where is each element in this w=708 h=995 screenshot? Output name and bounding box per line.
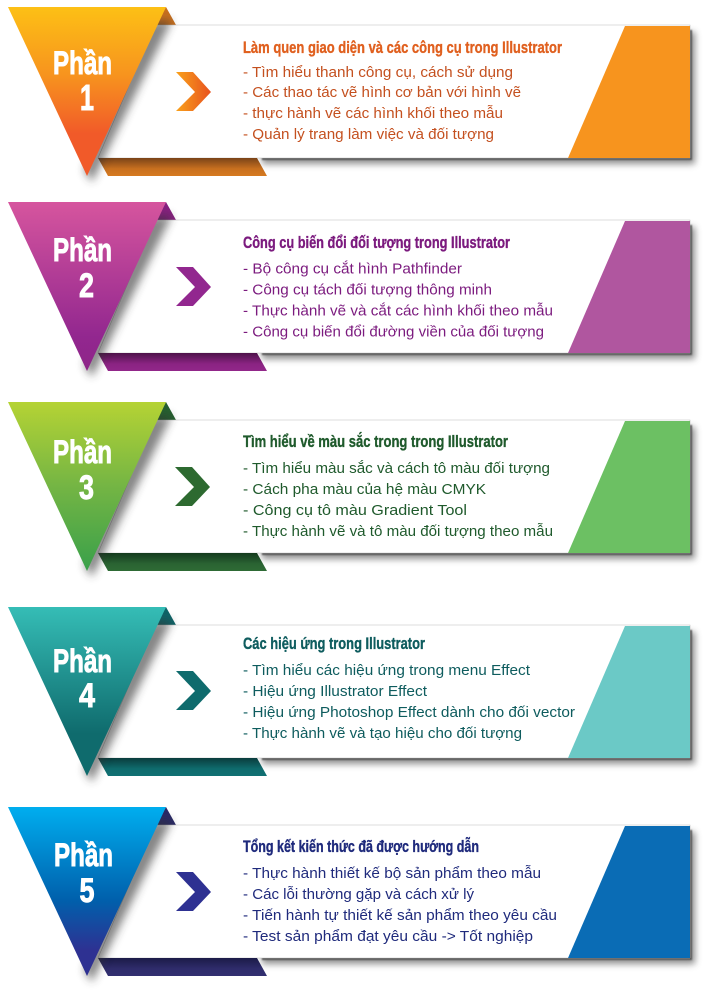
list 2: - Thực hành vẽ và cắt các hình khối theo mẫu	[243, 302, 553, 320]
list 4: - Tìm hiểu các hiệu ứng trong menu Effect	[243, 663, 530, 679]
triangle 4	[8, 607, 172, 782]
number 5: 5	[80, 872, 94, 910]
number 3: 3	[79, 469, 94, 507]
heading phần 4: Phần	[53, 643, 112, 679]
heading phần 5: Phần	[54, 837, 113, 873]
panel 1	[98, 25, 695, 164]
title 3: Tìm hiểu về màu sắc trong trong Illustrator	[243, 432, 508, 451]
panel 4	[98, 625, 695, 764]
list 4: - Thực hành vẽ và tạo hiệu cho đối tượng	[243, 726, 522, 742]
ribbon band bottom 2	[98, 353, 267, 371]
section 1	[8, 7, 695, 182]
panel 5	[98, 825, 695, 964]
list 5: - Thực hành thiết kế bộ sản phẩm theo mẫu	[243, 865, 541, 882]
triangle 1	[8, 7, 172, 182]
ribbon fold top 1	[156, 7, 176, 25]
section 5	[8, 807, 695, 982]
ribbon fold top 4	[156, 607, 176, 625]
list 2: - Công cụ tách đối tượng thông minh	[243, 282, 492, 298]
list 1	[243, 65, 521, 143]
list 5	[243, 865, 557, 945]
list 5: - Tiến hành tự thiết kế sản phẩm theo yêu cầu	[243, 908, 557, 924]
list 4: - Hiệu ứng Illustrator Effect	[243, 684, 427, 700]
triangle 5	[8, 807, 172, 982]
section 2	[8, 202, 695, 377]
list 5: - Các lỗi thường gặp và cách xử lý	[243, 886, 475, 903]
ribbon band bottom 5	[98, 958, 267, 976]
list 1: - Các thao tác vẽ hình cơ bản với hình vẽ	[243, 85, 521, 101]
chevron 3	[175, 467, 210, 506]
list 3: - Công cụ tô màu Gradient Tool	[243, 503, 467, 519]
triangle 2	[8, 202, 172, 377]
chevron 5	[176, 872, 211, 911]
chevron 4	[176, 671, 211, 710]
list 2: - Bộ công cụ cắt hình Pathfinder	[243, 260, 462, 278]
number 2: 2	[79, 267, 94, 305]
chevron 1	[176, 72, 211, 111]
number 4: 4	[79, 677, 95, 715]
number 1: 1	[80, 77, 94, 118]
heading phần 2: Phần	[53, 232, 112, 268]
ribbon fold top 5	[156, 807, 176, 825]
section 3	[8, 402, 695, 577]
list 4: - Hiệu ứng Photoshop Effect dành cho đối vector	[243, 705, 575, 721]
ribbon band bottom 1	[98, 158, 267, 176]
list 1: - thực hành vẽ các hình khối theo mẫu	[243, 105, 503, 122]
title 4: Các hiệu ứng trong Illustrator	[243, 635, 425, 653]
list 3: - Tìm hiểu màu sắc và cách tô màu đối tượng	[243, 460, 550, 477]
title 5: Tổng kết kiến thức đã được hướng dẫn	[243, 837, 479, 856]
ribbon fold top 2	[156, 202, 176, 220]
title 1: Làm quen giao diện và các công cụ trong Illustrator	[243, 39, 562, 57]
list 1: - Quản lý trang làm việc và đối tượng	[243, 127, 494, 143]
ribbon fold top 3	[156, 402, 176, 420]
list 4	[243, 663, 575, 742]
ribbon band bottom 4	[98, 758, 267, 776]
list 3: - Thực hành vẽ và tô màu đối tượng theo mẫu	[243, 523, 553, 540]
list 3: - Cách pha màu của hệ màu CMYK	[243, 482, 486, 498]
heading phần 1: Phần	[53, 45, 112, 81]
triangle 3	[8, 402, 172, 577]
list 3	[243, 460, 553, 540]
heading phần 3: Phần	[53, 434, 112, 470]
ribbon band bottom 3	[98, 553, 267, 571]
list 2	[243, 260, 553, 340]
list 5: - Test sản phẩm đạt yêu cầu -> Tốt nghiệp	[243, 929, 533, 945]
chevron 2	[176, 267, 211, 306]
section 4	[8, 607, 695, 782]
panel 2	[98, 220, 695, 359]
panel 3	[98, 420, 695, 559]
list 1: - Tìm hiểu thanh công cụ, cách sử dụng	[243, 65, 513, 81]
list 2: - Công cụ biến đổi đường viền của đối tượng	[243, 324, 544, 340]
title 2: Công cụ biến đổi đối tượng trong Illustrator	[243, 234, 510, 252]
